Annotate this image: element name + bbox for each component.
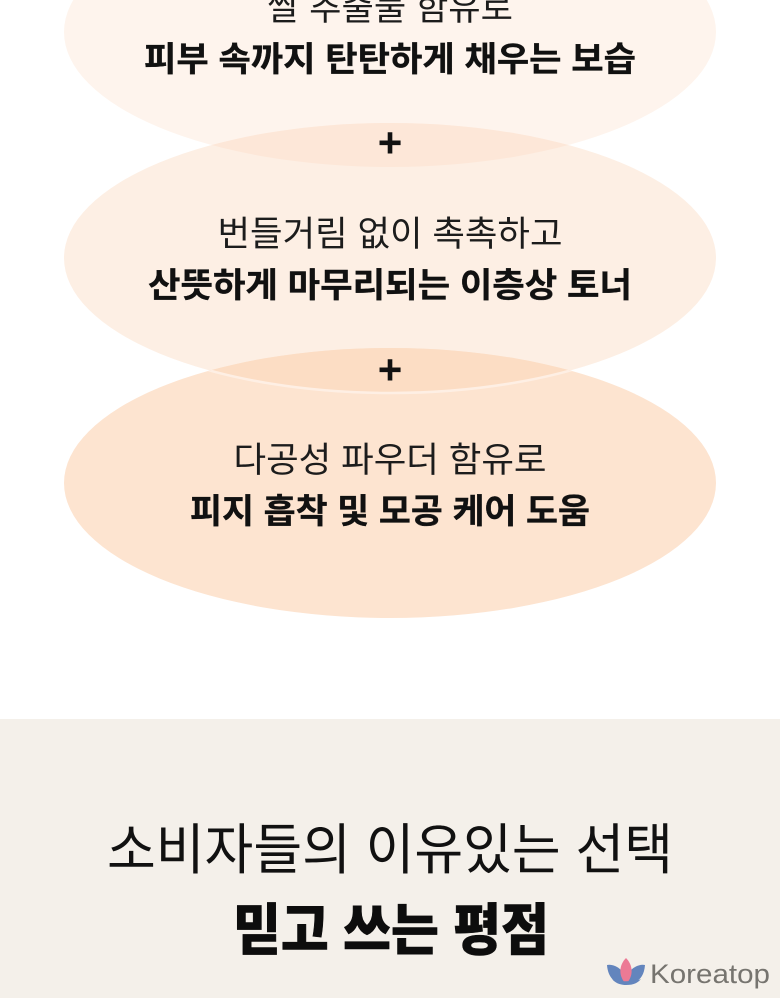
wordmark: Koreatop [650, 959, 770, 989]
third benefit bold text: 피지 흡착 및 모공 케어 도움 [190, 493, 590, 531]
second benefit bold text: 산뜻하게 마무리되는 이층상 토너 [148, 267, 632, 305]
panel: second benefit ellipse [64, 123, 716, 393]
icon: lotus [607, 958, 645, 985]
plus sign between second and third: + [378, 346, 402, 393]
third benefit light text: 다공성 파우더 함유로 [234, 441, 546, 480]
section heading bold: 믿고 쓰는 평점 [233, 899, 549, 962]
watermark logo: Koreatop [607, 958, 770, 989]
second benefit light text: 번들거림 없이 촉촉하고 [218, 215, 562, 254]
panel: third benefit ellipse [64, 348, 716, 618]
panel: ratings section background [0, 719, 780, 998]
panel: first benefit ellipse [64, 0, 716, 167]
first benefit bold text: 피부 속까지 탄탄하게 채우는 보습 [144, 41, 636, 79]
section heading light: 소비자들의 이유있는 선택 [107, 819, 673, 881]
plus sign between first and second: + [378, 119, 402, 166]
